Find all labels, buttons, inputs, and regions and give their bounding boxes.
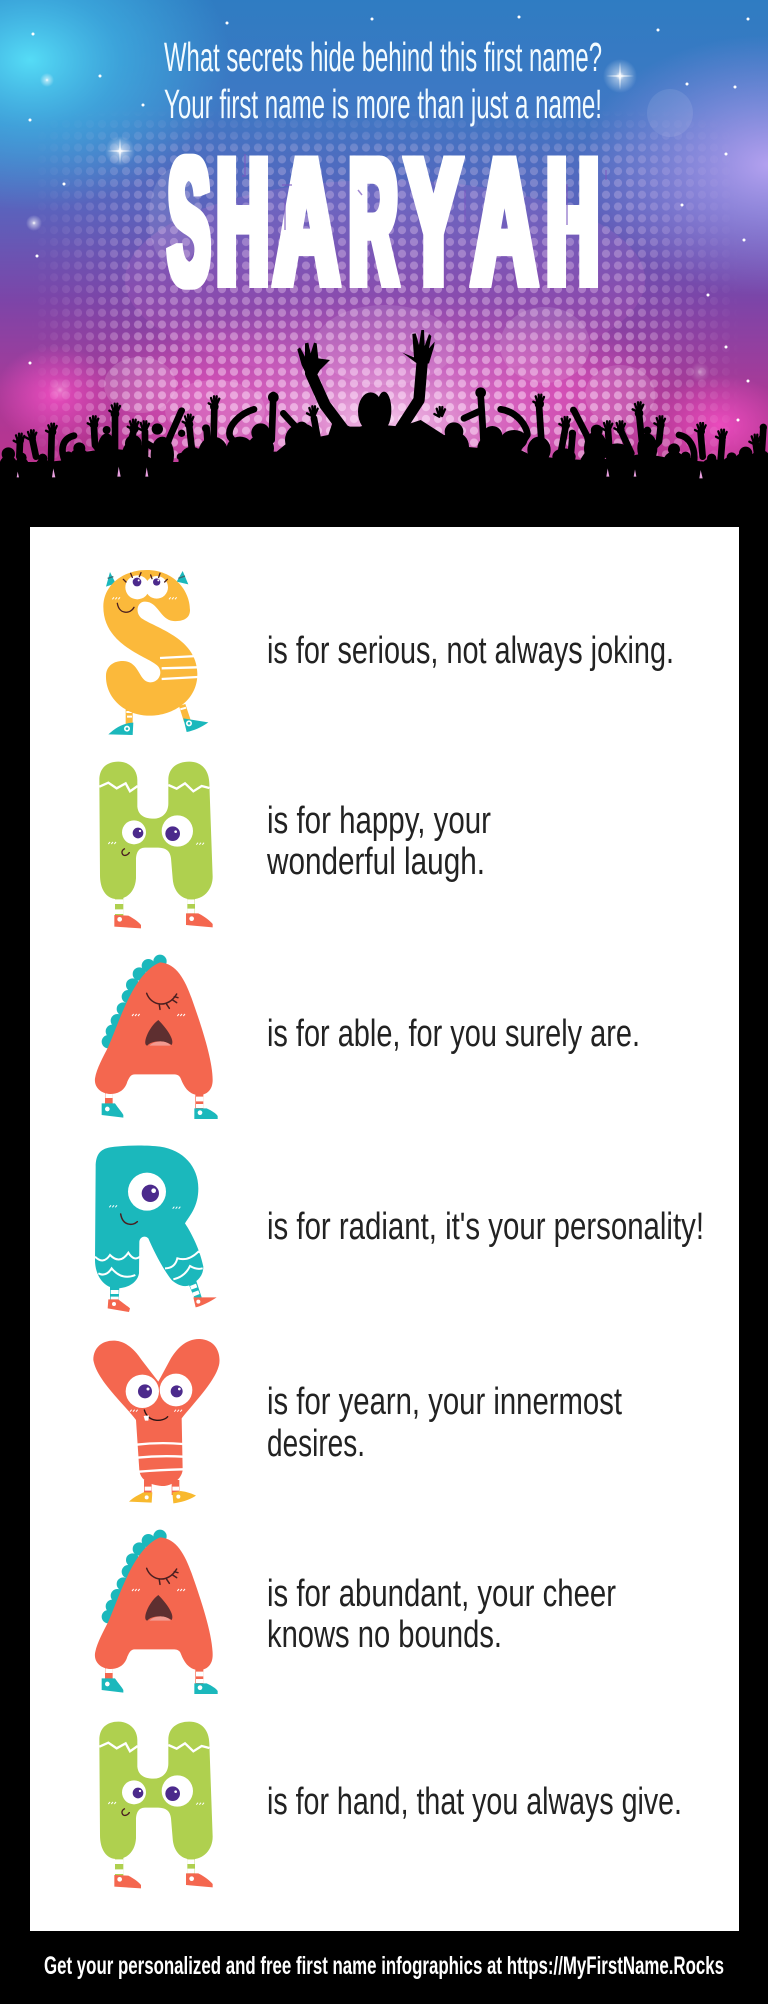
text: H lines [266,800,491,883]
text: Y lines: is for yearn, your innermost [267,1381,622,1423]
left half of crowd [0,342,384,478]
icon: letter R monster [95,1145,217,1312]
panel: white letter panel [30,527,739,1931]
text: second A lines: is for abundant, your cheer [267,1573,616,1615]
title: name: R [349,121,397,323]
icon: letter Y monster [93,1339,220,1503]
icon: second letter H monster [99,1722,213,1888]
text: Y lines: desires. [267,1423,365,1465]
text: H [547,121,599,323]
title: name: Y [406,121,461,323]
right half of crowd [377,330,768,493]
icon: letter H monster [99,762,213,928]
title: name: H [217,121,269,323]
title: name: A [274,121,339,323]
text: H lines: wonderful laugh. [266,841,485,883]
row: S [103,570,674,735]
row: A [95,955,640,1119]
row: second A [95,1530,616,1694]
title: name: S [168,121,210,323]
text: second A lines: knows no bounds. [267,1614,502,1656]
text: Y lines [267,1381,622,1465]
row: second H [99,1722,682,1888]
icon: letter S monster [103,570,208,735]
sparkles [26,16,750,422]
icon: second letter A monster [95,1530,218,1694]
row: Y [93,1339,622,1503]
row: R [95,1145,704,1312]
text: H lines: is for happy, your [267,800,491,842]
row: H [99,762,491,928]
title: name [168,121,606,323]
title: name: A [472,121,537,323]
panel: concert header background [0,0,768,462]
illustration: crowd silhouette [0,330,768,532]
icon: letter A monster [95,955,218,1119]
text: second A lines [267,1573,616,1656]
text: A line: is for able, for you surely are. [267,1013,640,1055]
